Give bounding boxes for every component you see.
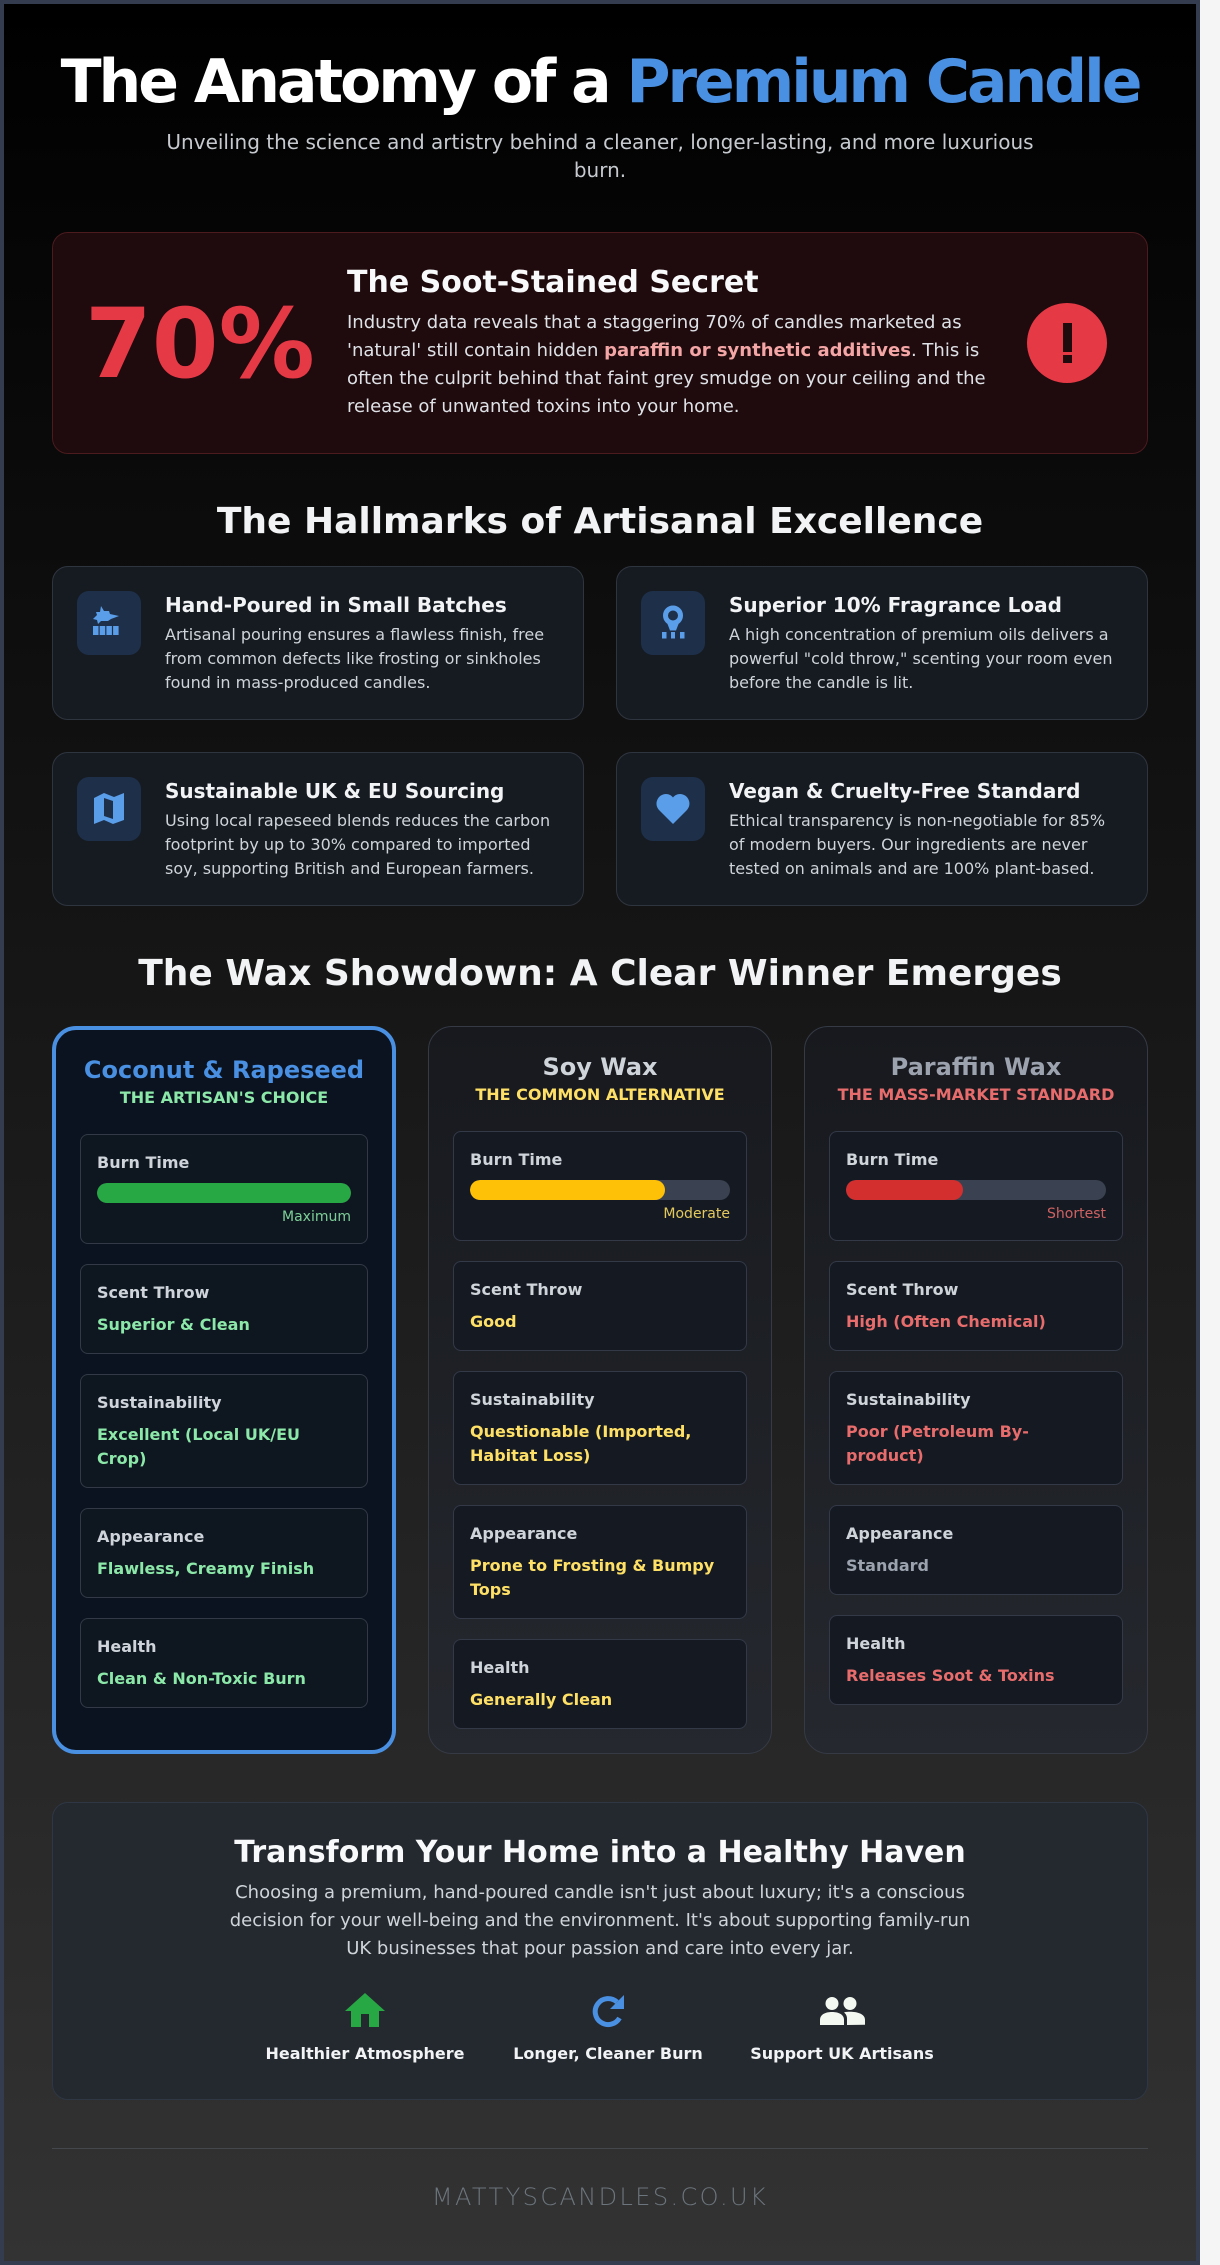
row: burn time: Moderate — [663, 1206, 730, 1222]
row: health: Health — [846, 1634, 906, 1653]
panel: soy wax — [428, 1026, 772, 1754]
card: hand-poured — [52, 566, 584, 720]
panel: paraffin wax — [804, 1026, 1148, 1754]
footer brand: MATTYSCANDLES.CO.UK — [432, 2183, 768, 2211]
row: appearance: Appearance — [470, 1524, 577, 1543]
card text: found in mass-produced candles. — [165, 673, 430, 692]
row: health: Releases Soot & Toxins — [846, 1666, 1055, 1685]
row: burn time: Burn Time — [97, 1153, 189, 1172]
row: health: Health — [97, 1637, 157, 1656]
icon: pouring — [77, 591, 141, 655]
card text — [165, 779, 550, 878]
column name: Soy Wax — [542, 1053, 658, 1081]
row: sustainability: Sustainability — [846, 1390, 971, 1409]
card text: before the candle is lit. — [729, 673, 913, 692]
row: appearance: Standard — [846, 1556, 929, 1575]
row: scent throw: Scent Throw — [846, 1280, 958, 1299]
callout body: release of unwanted toxins into your home. — [347, 396, 740, 417]
card text: powerful "cold throw," scenting your room even — [729, 649, 1112, 668]
label: artisans: Support UK Artisans — [750, 2044, 934, 2063]
card text — [729, 779, 1105, 878]
card text: soy, supporting British and European farmers. — [165, 859, 534, 878]
row: burn time: Burn Time — [470, 1150, 562, 1169]
row: sustainability: Sustainability — [97, 1393, 222, 1412]
card text: tested on animals and are 100% plant-based. — [729, 859, 1094, 878]
subtitle: burn. — [574, 158, 626, 182]
card text: A high concentration of premium oils delivers a — [729, 625, 1109, 644]
panel body: Choosing a premium, hand-poured candle isn't just about luxury; it's a conscious — [235, 1882, 965, 1903]
big statistic: 70% — [85, 288, 315, 400]
row: sustainability: product) — [846, 1446, 924, 1465]
icon: refresh — [592, 1995, 624, 2028]
panel body: UK businesses that pour passion and care into every jar. — [346, 1938, 854, 1959]
row: scent throw: Scent Throw — [97, 1283, 209, 1302]
card: vegan — [616, 752, 1148, 906]
card text: from common defects like frosting or sinkholes — [165, 649, 541, 668]
title: The Anatomy of a Premium Candle — [61, 47, 1139, 117]
card text: of modern buyers. Our ingredients are never — [729, 835, 1087, 854]
row: appearance — [80, 1508, 368, 1598]
row: health: Clean & Non-Toxic Burn — [97, 1669, 306, 1688]
row: scent throw — [453, 1261, 747, 1351]
callout body — [347, 312, 986, 417]
panel heading: Transform Your Home into a Healthy Haven — [234, 1835, 966, 1870]
row: sustainability: Crop) — [97, 1449, 146, 1468]
row: appearance — [453, 1505, 747, 1619]
label: atmosphere: Healthier Atmosphere — [265, 2044, 464, 2063]
card text: Ethical transparency is non-negotiable for 85% — [729, 811, 1105, 830]
card text: Superior 10% Fragrance Load — [729, 593, 1062, 617]
subtitle: Unveiling the science and artistry behind a cleaner, longer-lasting, and more luxurious — [166, 130, 1034, 154]
row: health: Health — [470, 1658, 530, 1677]
row: burn time: Burn Time — [846, 1150, 938, 1169]
panel: coconut and rapeseed — [52, 1026, 396, 1754]
callout heading: The Soot-Stained Secret — [347, 265, 759, 300]
row: health — [829, 1615, 1123, 1705]
row: appearance: Appearance — [846, 1524, 953, 1543]
row: sustainability — [80, 1374, 368, 1488]
row: sustainability: Excellent (Local UK/EU — [97, 1425, 300, 1444]
row: sustainability — [453, 1371, 747, 1485]
column name: Paraffin Wax — [891, 1053, 1061, 1081]
callout body: 'natural' still contain hidden paraffin or synthetic additives. This is — [347, 340, 979, 361]
row: burn time — [453, 1131, 747, 1241]
row: sustainability: Habitat Loss) — [470, 1446, 590, 1465]
row: burn time: Shortest — [1047, 1206, 1106, 1222]
row: scent throw — [80, 1264, 368, 1354]
row: health — [453, 1639, 747, 1729]
row: appearance: Tops — [470, 1580, 511, 1599]
panel body — [230, 1882, 970, 1959]
row: appearance: Appearance — [97, 1527, 204, 1546]
callout body: often the culprit behind that faint grey smudge on your ceiling and the — [347, 368, 986, 389]
column name: Coconut & Rapeseed — [84, 1056, 364, 1084]
icon: map — [77, 777, 141, 841]
card text: Hand-Poured in Small Batches — [165, 593, 507, 617]
icon: home — [345, 1993, 385, 2027]
heading: hallmarks: The Hallmarks of Artisanal Excellence — [217, 501, 983, 542]
label: burn: Longer, Cleaner Burn — [513, 2044, 703, 2063]
row: sustainability: Questionable (Imported, — [470, 1422, 691, 1441]
row: scent throw — [829, 1261, 1123, 1351]
row: scent throw: Good — [470, 1312, 517, 1331]
panel body: decision for your well-being and the environment. It's about supporting family-run — [230, 1910, 970, 1931]
row: scent throw: High (Often Chemical) — [846, 1312, 1046, 1331]
icon: warning circle — [1027, 303, 1107, 383]
card text — [729, 593, 1112, 692]
card text: Artisanal pouring ensures a flawless finish, free — [165, 625, 544, 644]
card text: Using local rapeseed blends reduces the carbon — [165, 811, 550, 830]
panel: soot-stained secret — [52, 232, 1148, 454]
icon: users — [820, 1997, 865, 2025]
icon: bulb — [641, 591, 705, 655]
row: scent throw: Superior & Clean — [97, 1315, 250, 1334]
card: fragrance load — [616, 566, 1148, 720]
row: burn time: Maximum — [282, 1209, 351, 1225]
footer brand — [52, 2148, 1148, 2220]
row: sustainability: Poor (Petroleum By- — [846, 1422, 1029, 1441]
card text: footprint by up to 30% compared to imported — [165, 835, 530, 854]
card text: Vegan & Cruelty-Free Standard — [729, 779, 1080, 803]
row: appearance — [829, 1505, 1123, 1595]
row: sustainability: Sustainability — [470, 1390, 595, 1409]
column tag: THE ARTISAN'S CHOICE — [120, 1088, 328, 1107]
panel: healthy haven — [52, 1802, 1148, 2100]
column tag: THE COMMON ALTERNATIVE — [475, 1085, 725, 1104]
icon: heart — [641, 777, 705, 841]
row: health: Generally Clean — [470, 1690, 612, 1709]
column tag: THE MASS-MARKET STANDARD — [838, 1085, 1114, 1104]
heading: wax showdown: The Wax Showdown: A Clear Winner Emerges — [138, 953, 1062, 994]
callout body: Industry data reveals that a staggering 70% of candles marketed as — [347, 312, 962, 333]
card text: Sustainable UK & EU Sourcing — [165, 779, 504, 803]
row: sustainability — [829, 1371, 1123, 1485]
row: burn time — [829, 1131, 1123, 1241]
row: health — [80, 1618, 368, 1708]
row: appearance: Flawless, Creamy Finish — [97, 1559, 314, 1578]
row: burn time — [80, 1134, 368, 1244]
row: appearance: Prone to Frosting & Bumpy — [470, 1556, 714, 1575]
subtitle — [166, 130, 1034, 182]
card text — [165, 593, 544, 692]
card: sourcing — [52, 752, 584, 906]
row: scent throw: Scent Throw — [470, 1280, 582, 1299]
